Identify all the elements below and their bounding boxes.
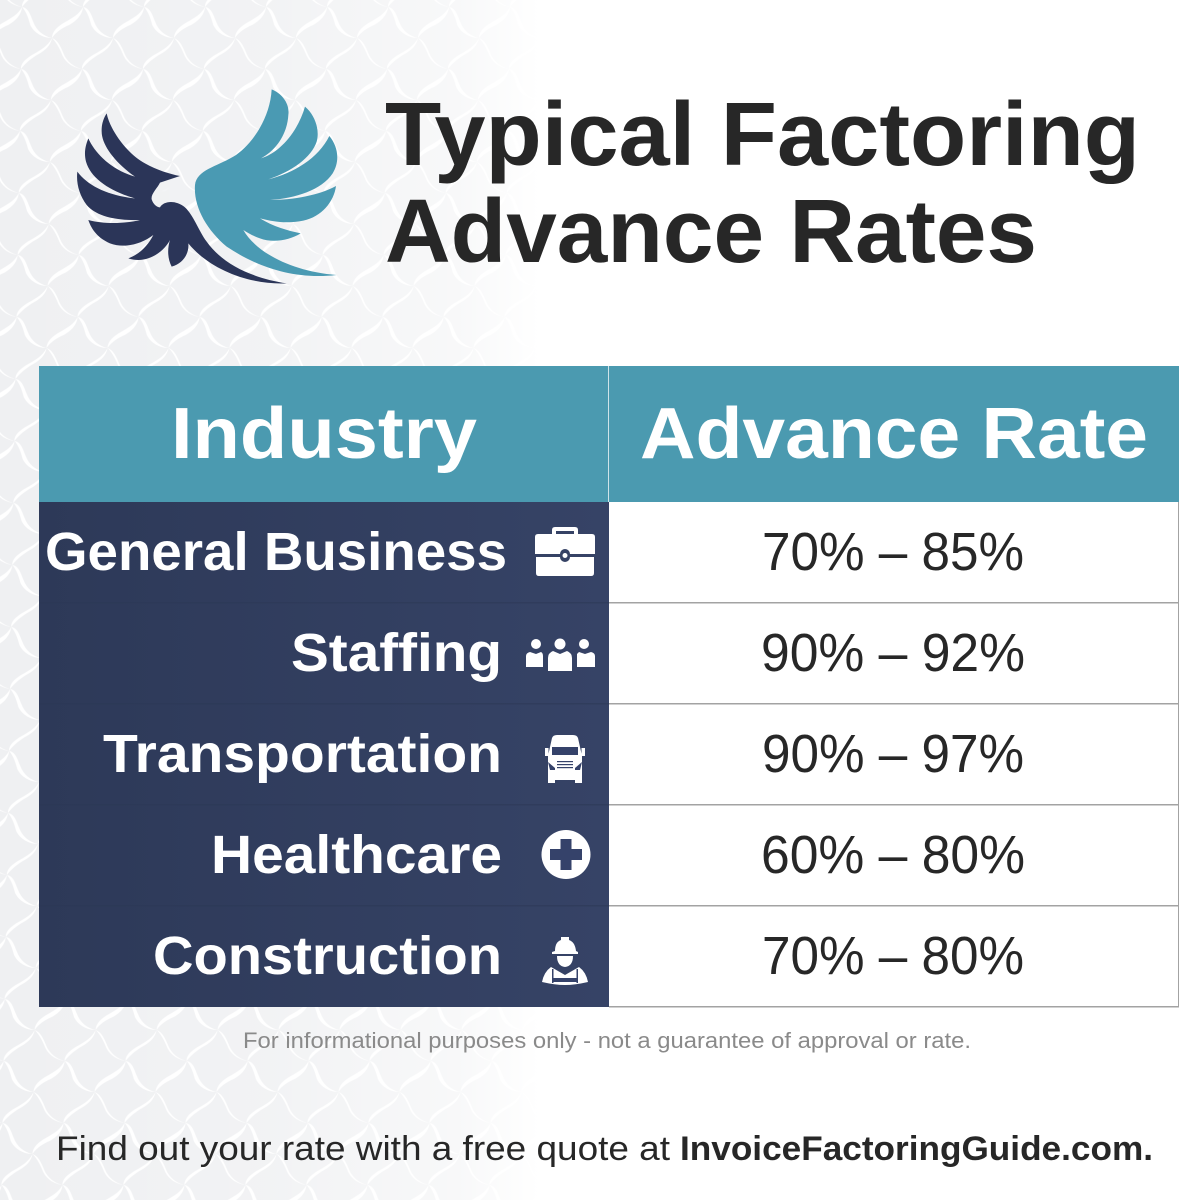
footer call to action: Find out your rate with a free quote at [56, 1130, 671, 1168]
industry column background [39, 502, 609, 1007]
footer call to action: InvoiceFactoringGuide.com. [680, 1130, 1153, 1168]
row: healthcare: 60% – 80% [761, 825, 1025, 885]
disclaimer note: For informational purposes only - not a guarantee of approval or rate. [243, 1028, 971, 1053]
logo dark wing and eagle head [77, 113, 287, 283]
row: construction: Construction [153, 926, 502, 986]
table [39, 366, 1179, 1008]
logo teal wing [195, 89, 337, 276]
row: healthcare: Healthcare [211, 825, 502, 885]
row: construction: 70% – 80% [762, 926, 1024, 986]
row: general business: General Business [45, 522, 507, 582]
icon: medical cross [542, 830, 590, 879]
table header: advance rate [608, 366, 1179, 502]
row: transportation: 90% – 97% [762, 724, 1024, 784]
row: transportation: Transportation [103, 724, 502, 784]
footer call to action [56, 1130, 1153, 1168]
row: healthcare [211, 825, 1025, 885]
table header: advance rate: Advance Rate [640, 394, 1148, 474]
table header: industry: Industry [171, 394, 477, 474]
icon: construction worker [542, 937, 588, 985]
table header: industry [39, 366, 609, 502]
title: Typical Factoring [385, 85, 1140, 185]
row: construction [153, 926, 1024, 986]
logo eagle eye [160, 187, 171, 192]
row: staffing: 90% – 92% [761, 623, 1025, 683]
icon: truck [545, 735, 585, 783]
logo: eagle with two wings [77, 89, 337, 283]
icon: briefcase [535, 527, 595, 576]
row: transportation [103, 724, 1024, 784]
row: staffing: Staffing [291, 623, 502, 683]
row: general business [45, 522, 1024, 582]
icon: three people [526, 638, 595, 671]
title: Advance Rates [385, 182, 1037, 282]
rate column background [609, 502, 1179, 1007]
row: staffing [291, 623, 1025, 683]
row: general business: 70% – 85% [762, 522, 1024, 582]
title [385, 85, 1140, 282]
